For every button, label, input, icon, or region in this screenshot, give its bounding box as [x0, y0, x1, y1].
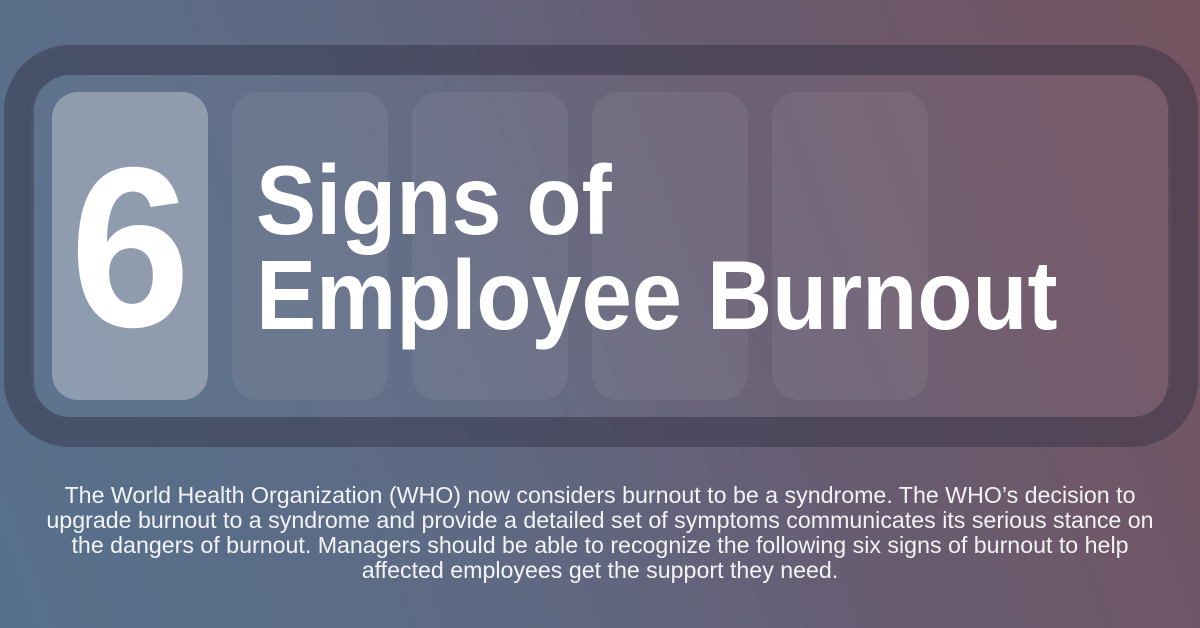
description paragraph: the dangers of burnout. Managers should be able to recognize the following six signs of burnout to help — [71, 532, 1128, 558]
description paragraph — [46, 482, 1154, 583]
big number 6: 6 — [70, 121, 190, 375]
tile 4 — [592, 92, 748, 400]
title — [256, 145, 1057, 350]
description paragraph: The World Health Organization (WHO) now considers burnout to be a syndrome. The WHO’s decision to — [65, 482, 1135, 508]
frame ring — [4, 45, 1198, 447]
tile 2 — [232, 92, 388, 400]
tile 5 — [772, 92, 928, 400]
title line 2: Employee Burnout — [256, 240, 1057, 350]
tile 3 — [412, 92, 568, 400]
description paragraph: affected employees get the support they need. — [362, 557, 838, 583]
tile 1 highlighted — [52, 92, 208, 400]
title line 1: Signs of — [256, 145, 612, 255]
description paragraph: upgrade burnout to a syndrome and provide a detailed set of symptoms communicates its serious stance on — [46, 507, 1154, 533]
inner panel — [31, 75, 1171, 417]
